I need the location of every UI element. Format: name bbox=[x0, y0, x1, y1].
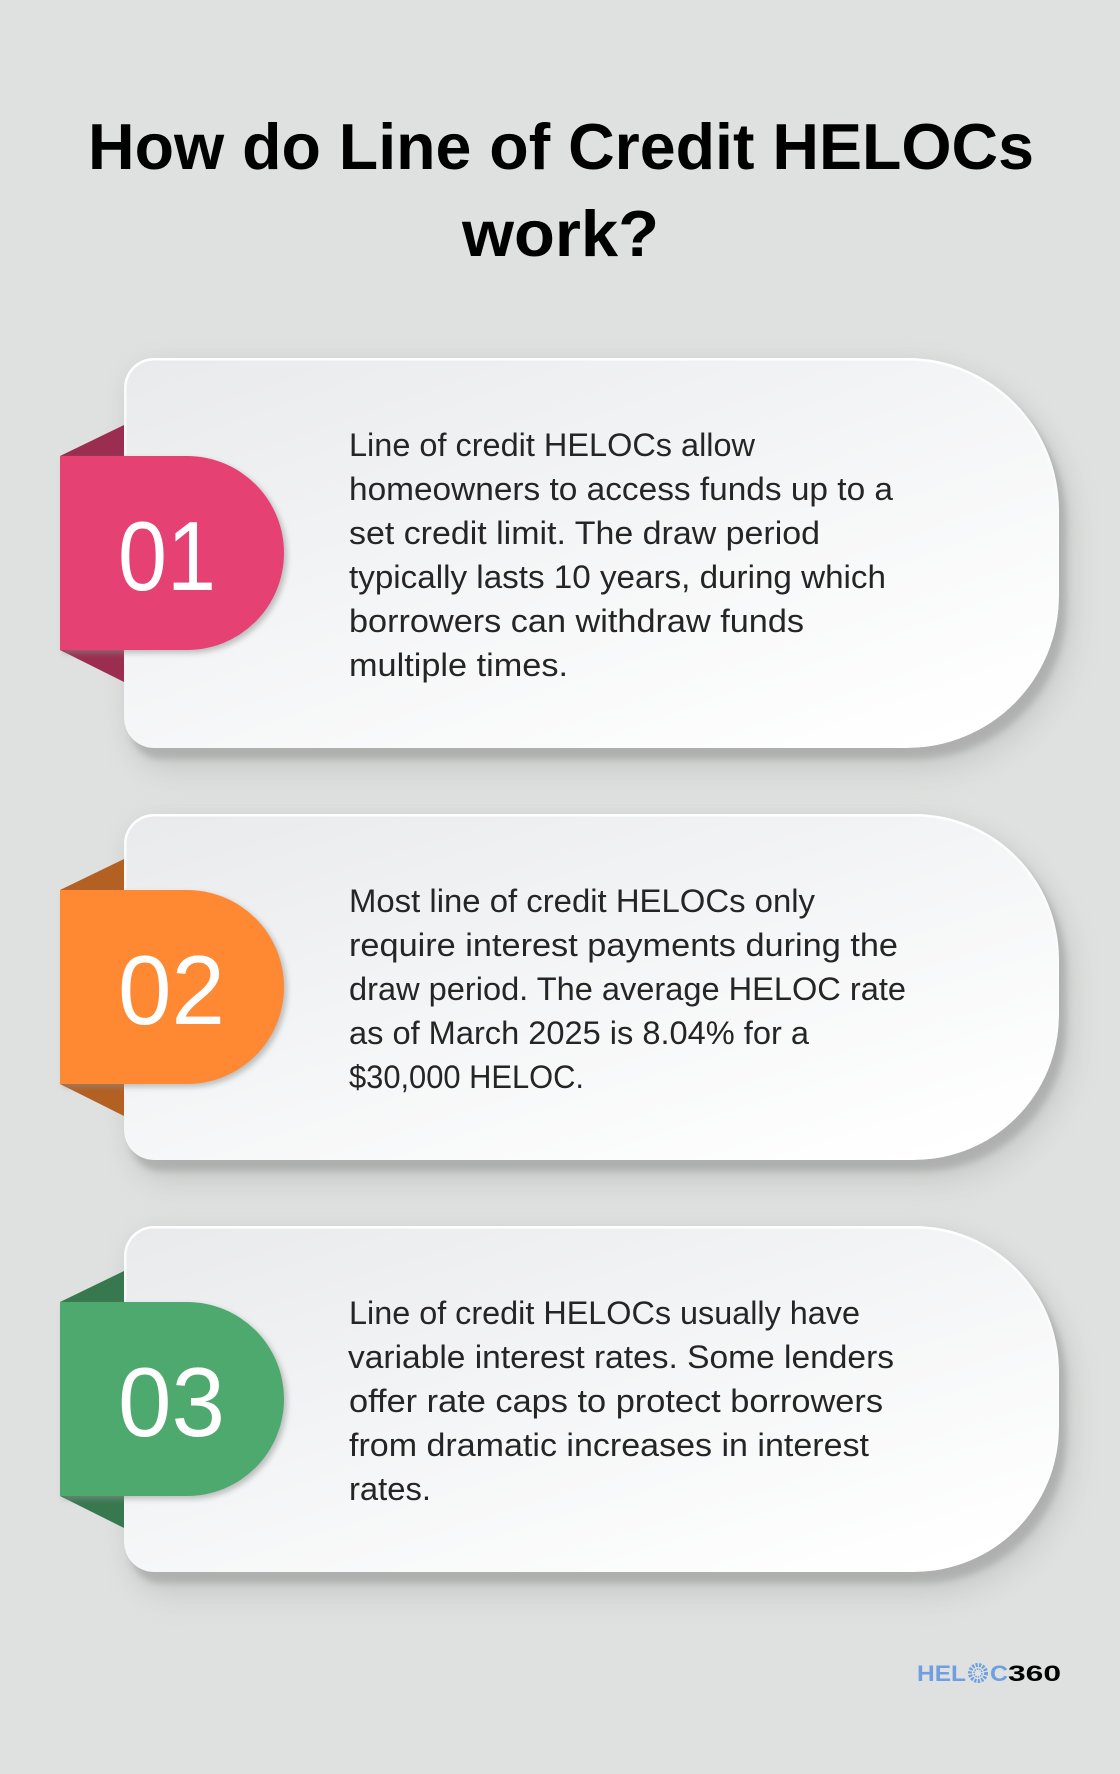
logo: HELOC360 bbox=[917, 1661, 1061, 1686]
description text, step 1: typically lasts 10 years, during which bbox=[349, 559, 886, 595]
description text, step 2: require interest payments during the bbox=[349, 927, 898, 963]
description text, step 2: draw period. The average HELOC rate bbox=[349, 971, 906, 1007]
description text, step 2 bbox=[349, 883, 906, 1095]
folded ribbon wedges, step 3 bbox=[60, 1271, 124, 1528]
description text, step 2: as of March 2025 is 8.04% for a bbox=[349, 1015, 809, 1051]
folded ribbon wedges, step 2 bbox=[60, 859, 124, 1116]
description text, step 1: Line of credit HELOCs allow bbox=[349, 427, 756, 463]
folded ribbon wedges, step 1 bbox=[60, 425, 124, 682]
number badge shadow, step 2 bbox=[63, 893, 287, 1087]
description text, step 1: borrowers can withdraw funds bbox=[349, 603, 804, 639]
title: How do Line of Credit HELOCs bbox=[88, 110, 1034, 183]
description text, step 3: from dramatic increases in interest bbox=[349, 1427, 869, 1463]
description text, step 1: homeowners to access funds up to a bbox=[349, 471, 893, 507]
logo: HELOC360: 360 bbox=[1008, 1661, 1061, 1686]
description text, step 2: Most line of credit HELOCs only bbox=[349, 883, 815, 919]
number badge, step 1: 01 bbox=[118, 501, 216, 611]
number badge, step 2 bbox=[60, 890, 284, 1084]
logo: HELOC360: HEL bbox=[917, 1661, 966, 1686]
description text, step 3 bbox=[348, 1295, 894, 1507]
card body, step 1 bbox=[124, 358, 1059, 748]
description text, step 3: Line of credit HELOCs usually have bbox=[349, 1295, 860, 1331]
title: work? bbox=[461, 197, 659, 270]
description text, step 2: $30,000 HELOC. bbox=[349, 1059, 584, 1095]
description text, step 3: rates. bbox=[349, 1471, 431, 1507]
panel: step 3 bbox=[60, 1226, 1071, 1594]
card body, step 2 bbox=[124, 814, 1059, 1160]
logo: HELOC360: C bbox=[990, 1661, 1008, 1686]
number badge shadow, step 1 bbox=[63, 459, 287, 653]
title bbox=[88, 110, 1034, 270]
number badge, step 3 bbox=[60, 1302, 284, 1496]
number badge, step 2: 02 bbox=[118, 935, 225, 1045]
number badge shadow, step 3 bbox=[63, 1305, 287, 1499]
number badge, step 3: 03 bbox=[118, 1347, 225, 1457]
icon: spiral O in logo bbox=[970, 1665, 986, 1681]
description text, step 1: multiple times. bbox=[349, 647, 568, 683]
panel: step 1 bbox=[60, 358, 1071, 770]
card body, step 3 bbox=[124, 1226, 1059, 1572]
panel: step 2 bbox=[60, 814, 1071, 1182]
description text, step 3: variable interest rates. Some lenders bbox=[348, 1339, 894, 1375]
description text, step 1 bbox=[349, 427, 893, 683]
description text, step 1: set credit limit. The draw period bbox=[349, 515, 820, 551]
description text, step 3: offer rate caps to protect borrowers bbox=[349, 1383, 883, 1419]
number badge, step 1 bbox=[60, 456, 284, 650]
